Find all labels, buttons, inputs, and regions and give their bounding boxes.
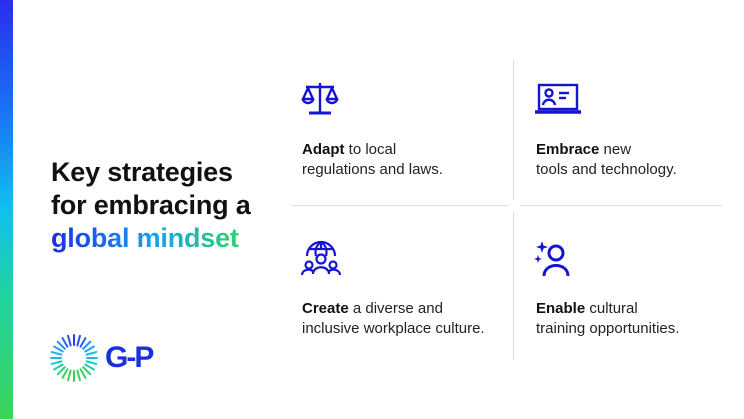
text: Adapt to local bbox=[302, 141, 396, 158]
icon: globe people bbox=[301, 240, 341, 275]
panel: adapt bbox=[301, 83, 443, 178]
text bbox=[536, 141, 677, 178]
dividers bbox=[513, 60, 514, 200]
title bbox=[51, 157, 251, 253]
text bbox=[536, 300, 679, 337]
text bbox=[302, 300, 485, 337]
icon: person sparkle bbox=[534, 241, 570, 276]
title: Key strategies bbox=[51, 157, 233, 187]
panel: create bbox=[301, 240, 485, 337]
text: training opportunities. bbox=[536, 320, 679, 337]
panel: enable bbox=[534, 241, 679, 337]
logo bbox=[50, 334, 154, 382]
title: for embracing a bbox=[51, 190, 251, 220]
icon: scales bbox=[301, 83, 339, 114]
text: Embrace new bbox=[536, 141, 631, 158]
left gradient strip bbox=[0, 0, 13, 419]
title: global mindset bbox=[51, 223, 239, 253]
panel: embrace bbox=[535, 84, 677, 178]
text: Create a diverse and bbox=[302, 300, 443, 317]
icon: sunburst bbox=[50, 334, 98, 382]
icon: laptop bbox=[535, 84, 581, 114]
text: Enable cultural bbox=[536, 300, 638, 317]
text bbox=[302, 141, 443, 178]
text: tools and technology. bbox=[536, 161, 677, 178]
text: inclusive workplace culture. bbox=[302, 320, 485, 337]
logo text: G-P bbox=[105, 341, 152, 374]
text: regulations and laws. bbox=[302, 161, 443, 178]
